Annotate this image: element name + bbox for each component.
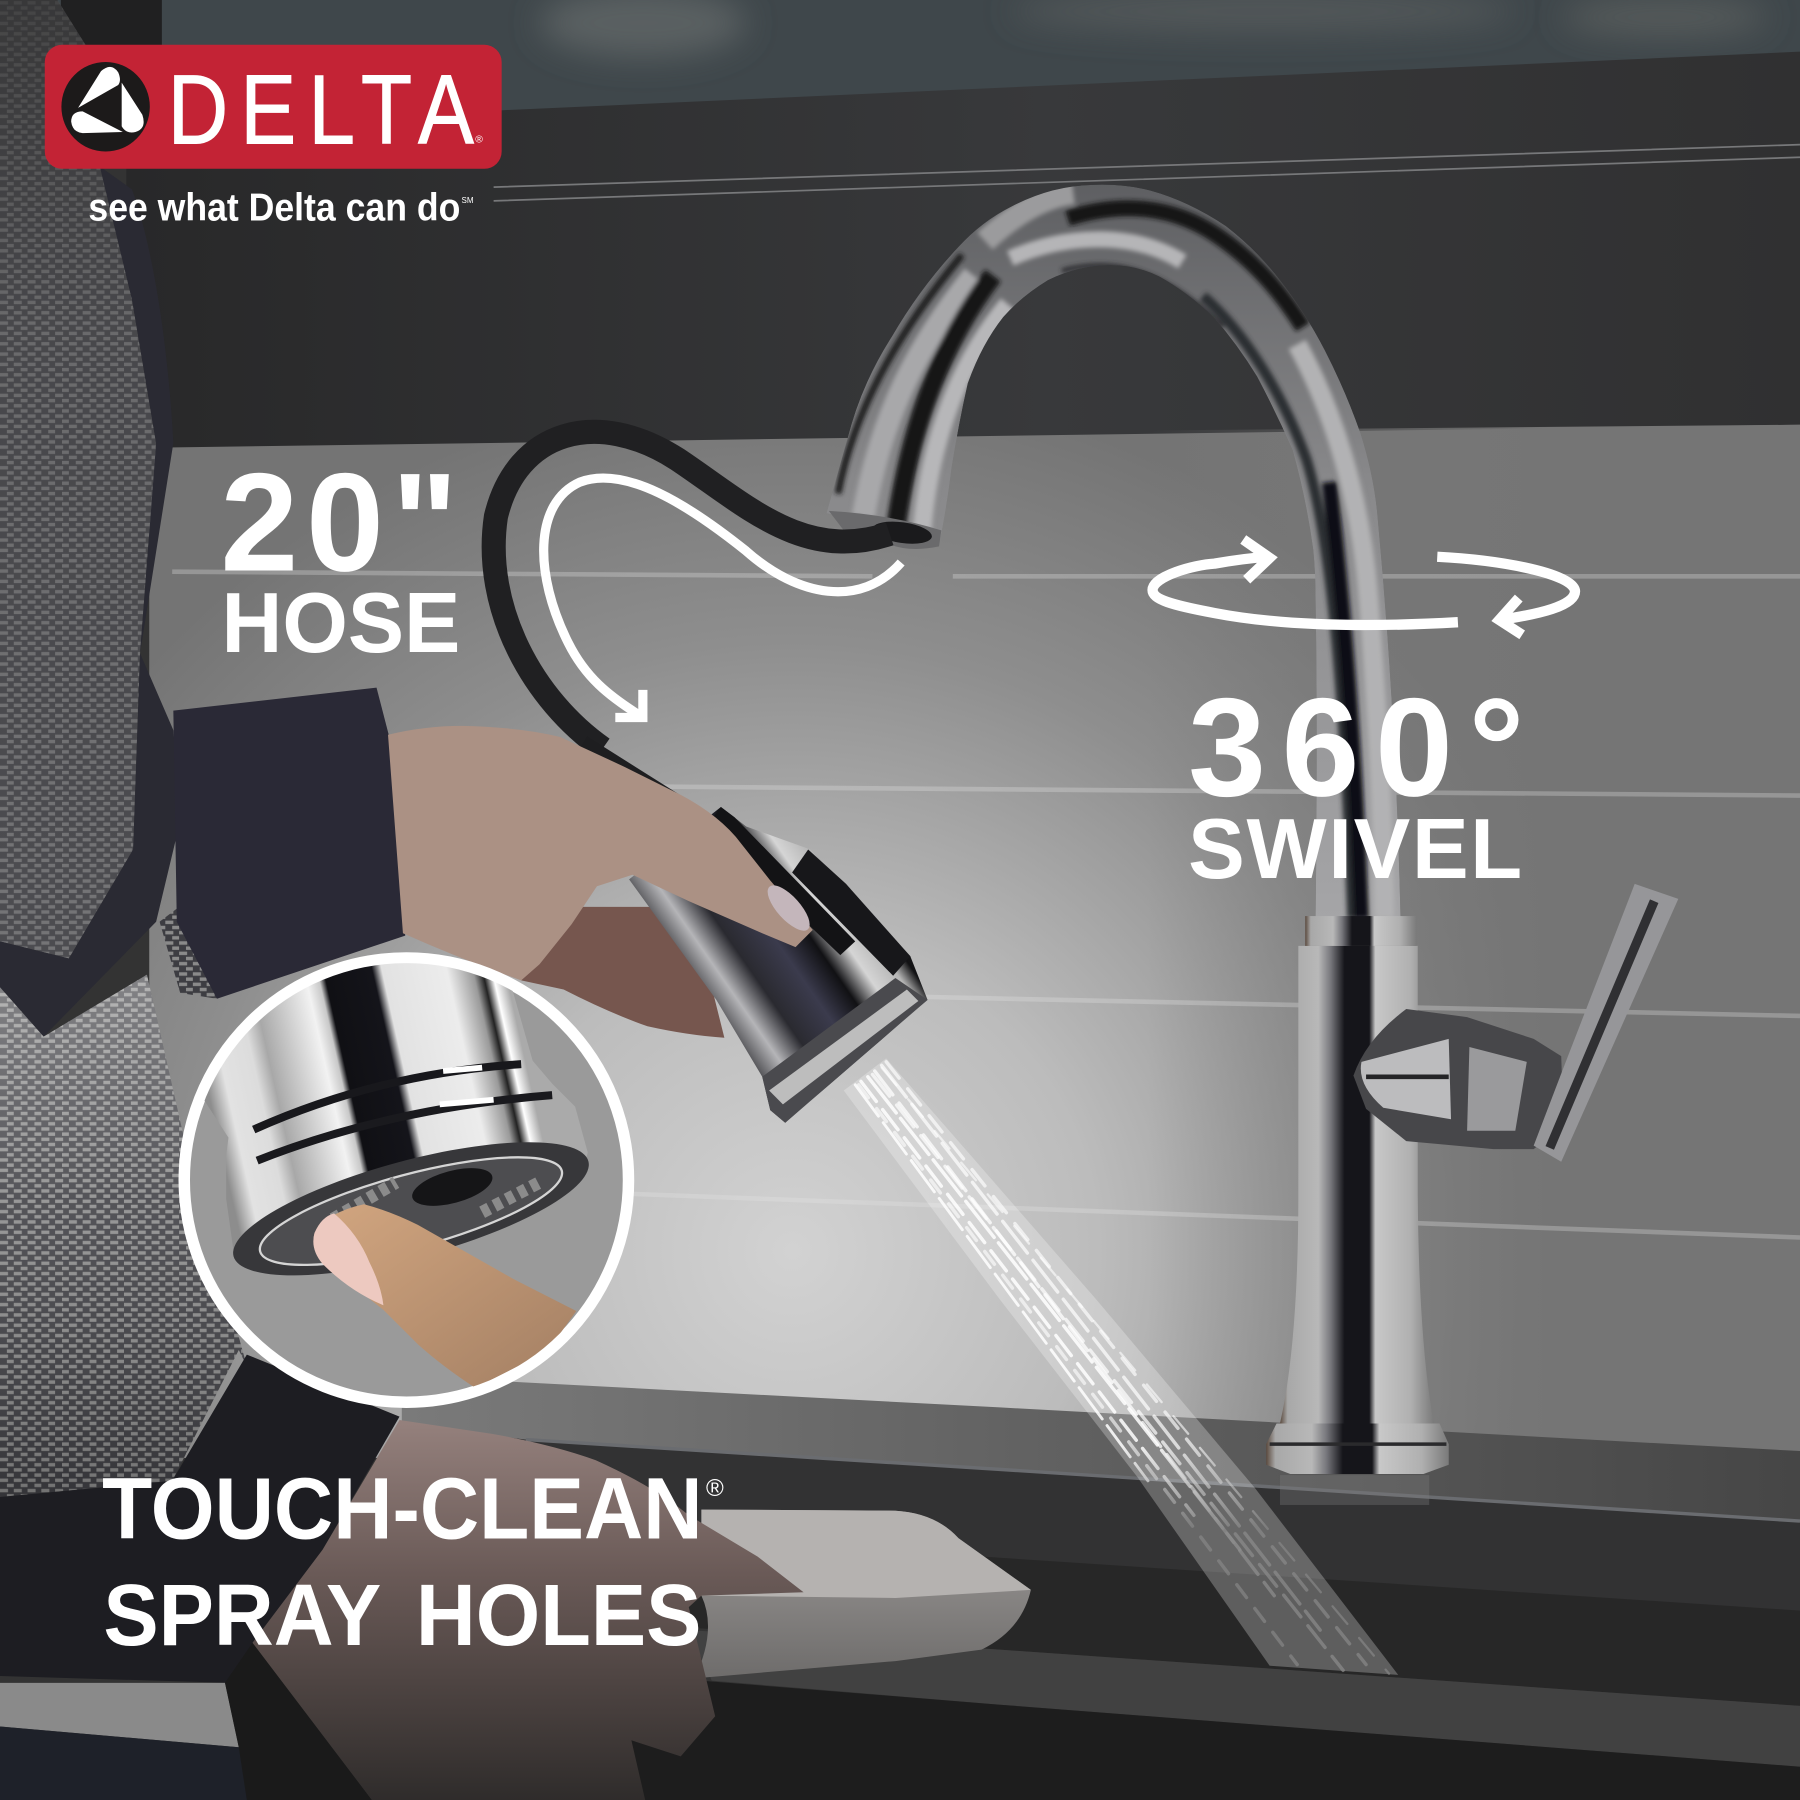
lower hand: [253, 1420, 804, 1800]
hose label: HOSE: [222, 575, 460, 670]
spout opening: [871, 518, 933, 547]
logo wordmark: DELTA: [168, 55, 474, 165]
touch-clean heading: SPRAY HOLES: [103, 1567, 701, 1664]
fingernail: [313, 1213, 383, 1305]
swivel number: 360°: [1188, 669, 1524, 826]
faucet foot: [1266, 1423, 1449, 1474]
spray center: [412, 1168, 492, 1206]
counter ledge: [689, 1630, 1800, 1767]
background: wall right shade: [1148, 425, 1800, 1458]
tagline: see what Delta can do: [88, 186, 460, 229]
finger: [314, 1204, 576, 1388]
person: knit sweater upper: [0, 0, 156, 959]
touch-clean heading: TOUCH-CLEAN: [102, 1460, 703, 1557]
spray face inner ring: [258, 1156, 564, 1266]
counter top: [402, 1375, 1800, 1520]
background: dark window post: [61, 0, 162, 119]
touch-clean heading: [102, 1460, 724, 1664]
hub ring: [1467, 1047, 1527, 1131]
hand: back and thumb: [388, 726, 813, 980]
faucet base column: [1280, 946, 1434, 1423]
logo symbol: [61, 62, 150, 152]
touch-clean heading: ®: [706, 1475, 724, 1502]
hose length number: 20": [220, 444, 458, 601]
close-up ring grooves: [254, 1064, 552, 1161]
logo badge: [45, 45, 502, 169]
hand: lower fingers: [521, 907, 724, 1038]
tile grout lines: [172, 572, 1800, 1238]
plate inner: [701, 1510, 1031, 1598]
handle lever: [1534, 884, 1678, 1162]
background: dark window frame: [126, 52, 1800, 450]
water spray: [844, 1058, 1398, 1675]
spray head rim: [762, 978, 928, 1123]
handle hub: [1353, 1009, 1564, 1149]
person: shirt hem: [0, 1683, 239, 1747]
counter front lower: [402, 1515, 1800, 1706]
plate: [695, 1510, 1031, 1678]
spray holes: [333, 1182, 540, 1219]
swivel label: SWIVEL: [1188, 801, 1522, 896]
spout outlet: [829, 511, 941, 549]
person: upper cuff: [173, 688, 405, 999]
logo registered mark: ®: [475, 134, 483, 145]
counter front upper: [402, 1423, 1800, 1611]
faucet collar: [1305, 916, 1417, 946]
person: dark area beside hand: [225, 1643, 372, 1800]
spray head black buttons: [706, 807, 855, 955]
person: lower clothing: [0, 1727, 264, 1800]
person: vest edge: [0, 166, 181, 1037]
hub cylinder stripe: [1366, 1075, 1449, 1079]
faucet: [827, 185, 1678, 1505]
background: window view: [0, 0, 1800, 126]
window frame reflections: [494, 145, 1800, 201]
lever dark stripe: [1550, 901, 1654, 1148]
spray face: [233, 1142, 589, 1276]
spray hose: [494, 432, 890, 748]
hose connector: [583, 743, 689, 809]
background: tile wall: [149, 425, 1800, 1458]
inset circle: touch-clean close-up: [184, 953, 629, 1402]
fingernail: [761, 879, 816, 937]
foot reflection: [1280, 1475, 1429, 1505]
counter edge highlight: [526, 1440, 1800, 1521]
faucet foot ring: [1270, 1443, 1446, 1446]
hub cylinder highlight: [1361, 1039, 1451, 1119]
hose arrow: [544, 478, 901, 717]
spray head: [629, 807, 928, 1123]
spray head close-up body: [201, 953, 588, 1256]
swivel arrows: [1153, 540, 1575, 635]
person: knit sweater lower: [0, 975, 247, 1497]
person: lower sleeve: [0, 1355, 399, 1683]
person: cuff pattern: [160, 889, 217, 999]
floor shadow: [620, 1676, 1800, 1800]
gooseneck spout: [827, 185, 1401, 918]
tagline: SM: [461, 196, 474, 205]
